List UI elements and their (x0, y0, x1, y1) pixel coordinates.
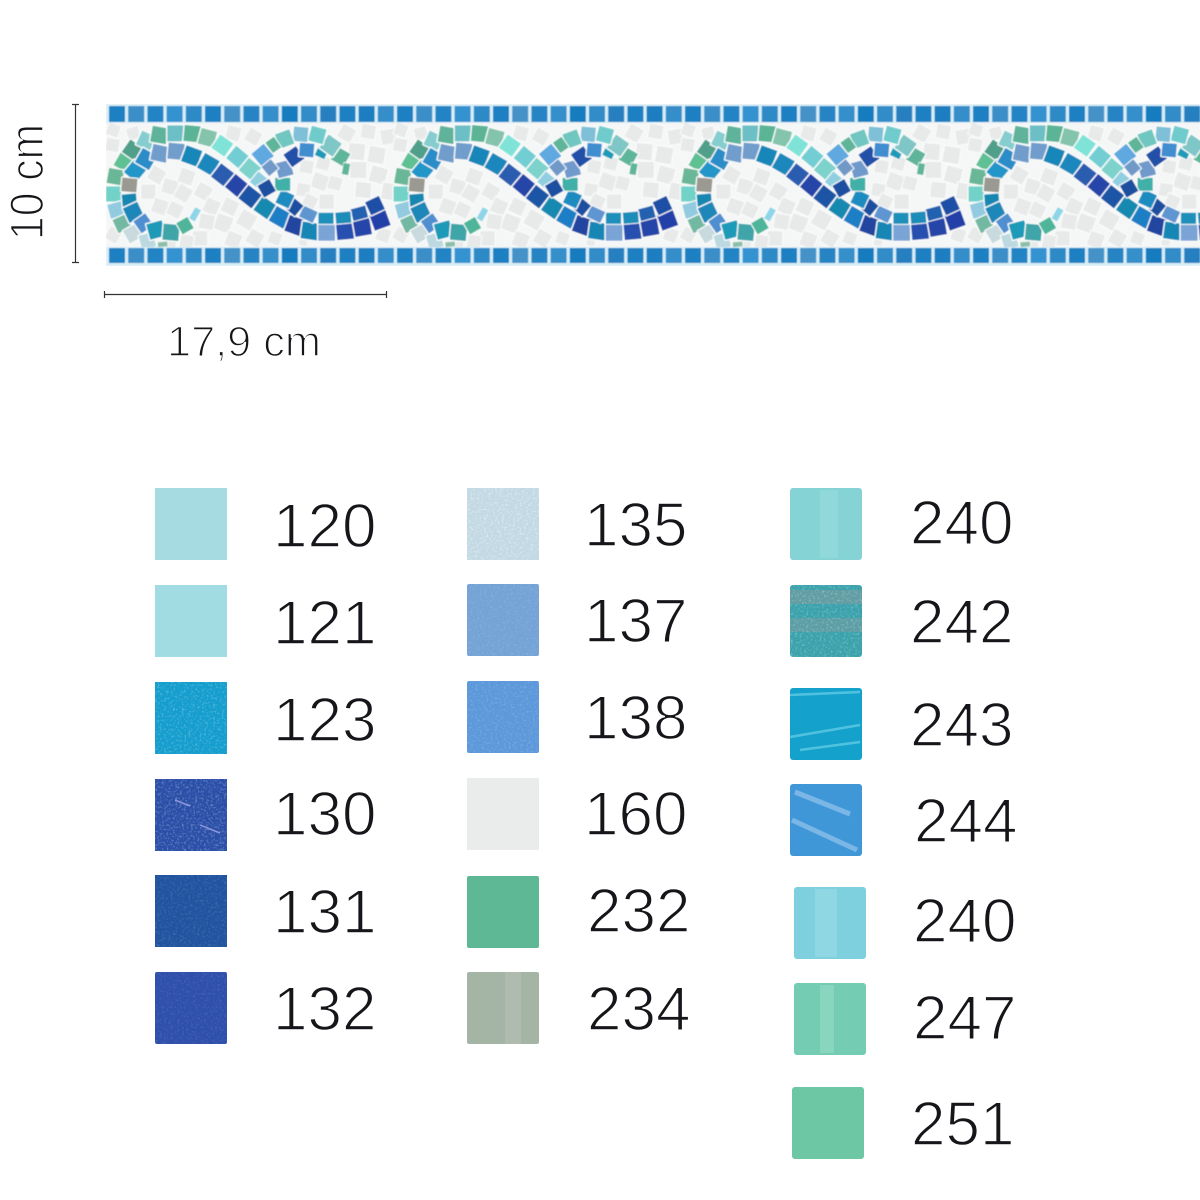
swatch 160: 160 (584, 780, 687, 849)
wave repeat 4 (966, 122, 1200, 252)
swatch 242 (790, 585, 1013, 657)
mosaic border strip (104, 104, 1200, 266)
swatch 132: 132 (273, 975, 376, 1044)
wave repeat 3 (679, 122, 975, 252)
swatch 240 (790, 488, 1013, 560)
swatch 123 (155, 682, 376, 755)
swatch 131: 131 (273, 878, 376, 947)
swatch 247 (794, 983, 1016, 1055)
swatch 135: 135 (584, 491, 687, 560)
swatch 120 (155, 488, 376, 561)
swatch 232 (467, 876, 690, 948)
swatch 138: 138 (584, 684, 687, 753)
swatch 247: 247 (913, 984, 1016, 1053)
swatch 130 (155, 779, 376, 851)
swatch 138 (467, 681, 687, 753)
swatch 160 (467, 778, 687, 850)
wave repeat 1 (104, 122, 400, 252)
swatch 123: 123 (273, 686, 376, 755)
swatch 232: 232 (587, 877, 690, 946)
swatch 243 (790, 688, 1013, 760)
swatch 130: 130 (273, 780, 376, 849)
swatch 240 second: 240 (913, 887, 1016, 956)
swatch 120: 120 (273, 492, 376, 561)
height label: 10 cm (0, 124, 53, 240)
swatch 121 (155, 585, 376, 658)
top tile row (106, 104, 1200, 123)
swatch 234 (467, 972, 690, 1044)
swatch 251: 251 (911, 1090, 1014, 1159)
swatch 240 second (794, 887, 1016, 959)
wave repeat 2 (391, 122, 688, 252)
swatch 244: 244 (914, 787, 1017, 856)
width label: 17,9 cm (167, 318, 321, 366)
swatch 137 (467, 584, 687, 656)
swatch 132 (155, 972, 376, 1044)
swatch 244 (790, 784, 1017, 856)
width dimension line (104, 291, 387, 298)
swatch 242: 242 (910, 588, 1013, 657)
swatch column 3 (790, 488, 1017, 1159)
swatch 135 (467, 488, 687, 560)
swatch 251 (792, 1087, 1014, 1159)
swatch 137: 137 (584, 587, 687, 656)
height dimension line (72, 104, 79, 263)
swatch 240: 240 (910, 489, 1013, 558)
bottom tile row (106, 247, 1200, 266)
swatch column 2 (467, 488, 690, 1044)
swatch 131 (155, 875, 376, 947)
swatch 234: 234 (587, 975, 690, 1044)
swatch 243: 243 (910, 691, 1013, 760)
swatch column 1 (155, 488, 376, 1044)
swatch 121: 121 (273, 589, 376, 658)
